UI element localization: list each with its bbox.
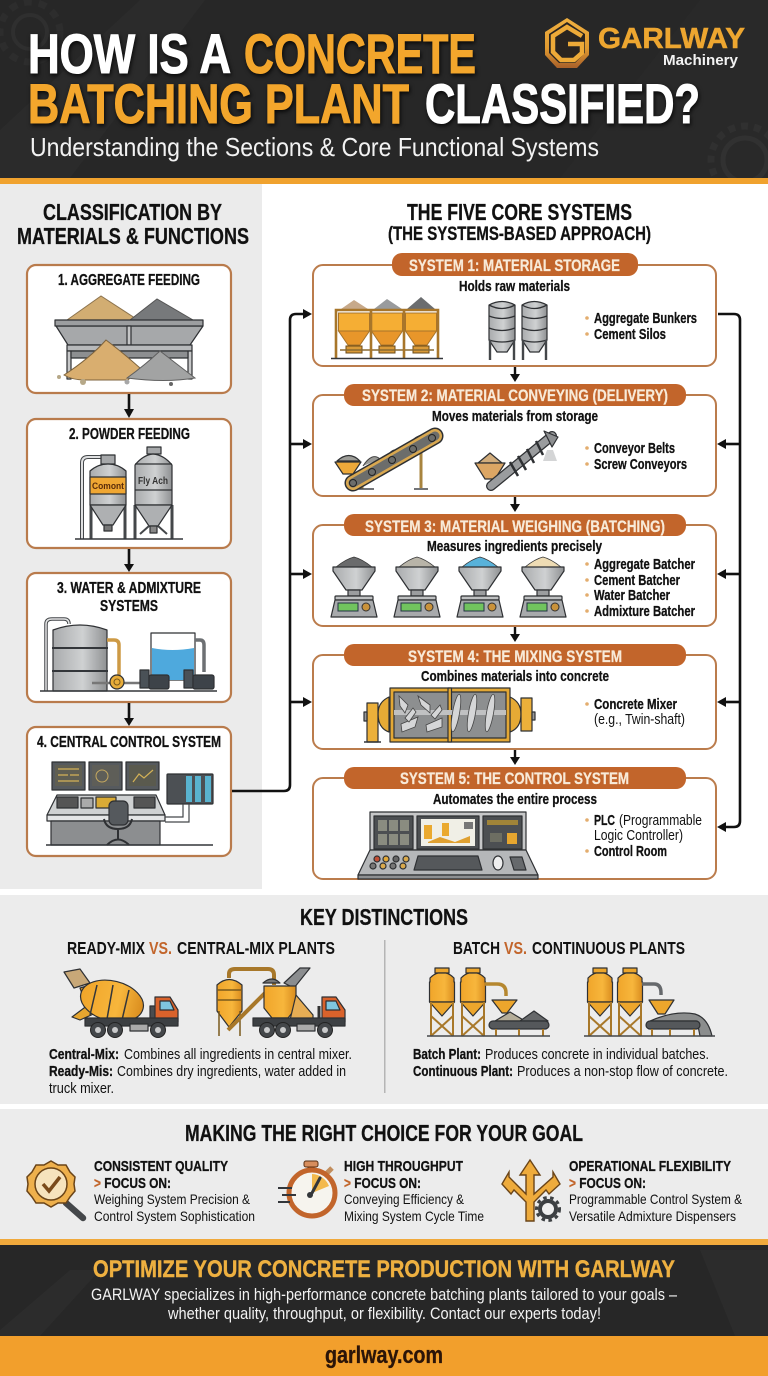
header banner [0,0,768,194]
icon: screw conveyor [475,431,558,486]
text: high throughput [344,1158,484,1224]
subheading: ready-mix vs central-mix: CENTRAL-MIX PLANTS [177,938,335,958]
icon: control desk with monitors [46,762,213,845]
text: high throughput: > FOCUS ON: [344,1175,421,1192]
text: high throughput: Conveying Efficiency & [344,1191,465,1207]
bullet list [585,441,687,473]
icon: conveyor belt [335,434,436,489]
icon: stopwatch [278,1161,335,1216]
card: powder feeding: 2. POWDER FEEDING [69,426,190,443]
card: central control system [27,727,231,856]
heading: key distinctions: KEY DISTINCTIONS [300,904,468,930]
footer text [91,1285,677,1323]
flow line: feedback on the right [717,314,740,832]
subheading: ready-mix vs central-mix [67,938,335,958]
text: central-mix and ready-mix: Combines all ingredients in central mixer. [124,1047,352,1063]
text: central-mix and ready-mix [49,1047,352,1097]
panel: classification by materials and functions [0,184,262,889]
icon: quality badge with magnifier [27,1161,83,1218]
subheading: ready-mix vs central-mix: VS. [149,938,172,958]
logo: Garlway Machinery [545,18,745,69]
heading: the five core systems: (THE SYSTEMS-BASED APPROACH) [388,224,651,245]
subtitle: Understanding the Sections & Core Functional Systems [30,132,599,162]
icon: continuous plant [584,968,715,1036]
panel: system 1 material storage: Holds raw materials [459,278,570,295]
arrow: system 3 to 4 [510,627,520,642]
website bar [0,1336,768,1376]
arrow: aggregate to powder [124,394,134,418]
bullet list [585,557,695,620]
left panel heading: MATERIALS & FUNCTIONS [17,223,249,249]
text: consistent quality: Weighing System Precision & [94,1191,251,1207]
panel: key distinctions [0,895,768,1104]
text: central-mix and ready-mix: Central-Mix: [49,1047,119,1063]
icon: aggregate batcher scale [331,557,377,617]
subheading: batch vs continuous: BATCH [453,938,500,958]
bullet list: (Programmable [619,813,702,829]
logo icon [545,18,589,68]
flow line: control system to all core systems [232,309,312,791]
card: powder feeding [27,419,231,548]
panel: system 2 material conveying: SYSTEM 2: MATERIAL CONVEYING (DELIVERY) [362,386,668,405]
bullet list: (e.g., Twin-shaft) [594,712,685,728]
arrow: water to control [124,703,134,726]
text: operational flexibility [569,1158,743,1224]
bullet list: Conveyor Belts [594,441,675,457]
subheading: batch vs continuous: VS. [504,938,527,958]
panel: system 5 control [313,767,716,879]
bullet list: Aggregate Batcher [594,557,695,573]
text: central-mix and ready-mix: Combines dry ingredients, water added in [117,1064,346,1080]
text: high throughput: Mixing System Cycle Time [344,1208,484,1224]
bullet list: Concrete Mixer [594,697,677,713]
card: water and admixture systems [27,573,231,702]
bullet list: Control Room [594,844,667,860]
text: consistent quality: Control System Sophistication [94,1208,255,1224]
text: central-mix and ready-mix: truck mixer. [49,1081,114,1097]
text: central-mix and ready-mix: Ready-Mis: [49,1064,113,1080]
icon: central-mix plant [217,968,345,1038]
panel: system 4 mixing [313,644,716,749]
arrow: system 1 to 2 [510,367,520,382]
bullet list: PLC [594,813,615,829]
text: consistent quality: > FOCUS ON: [94,1175,171,1192]
icon: diverging arrows with gear [502,1160,560,1221]
heading: making the right choice: MAKING THE RIGHT CHOICE FOR YOUR GOAL [185,1120,583,1146]
title: HOW IS A [28,22,231,85]
logo tagline: Machinery [663,52,739,69]
text: batch and continuous [413,1047,728,1080]
subheading: batch vs continuous [453,938,685,958]
text: batch and continuous: Produces concrete in individual batches. [485,1047,709,1063]
heading: the five core systems [388,199,651,245]
panel: system 2 material conveying [313,384,716,496]
card: central control system: 4. CENTRAL CONTROL SYSTEM [37,734,221,751]
bullet list [585,813,702,860]
icon: aggregate bins and piles [55,296,203,386]
title: CONCRETE [244,22,476,85]
panel: system 4 mixing: Combines materials into concrete [421,668,609,685]
panel: system 2 material conveying: Moves materials from storage [432,408,598,425]
footer text: whether quality, throughput, or flexibility. Contact our experts today! [167,1304,601,1323]
text: consistent quality [94,1158,255,1224]
icon: ready-mix truck [64,969,178,1038]
footer text: GARLWAY specializes in high-performance concrete batching plants tailored to your goals – [91,1285,677,1304]
card: aggregate feeding [27,265,231,393]
text: operational flexibility: > FOCUS ON: [569,1175,646,1192]
text: batch and continuous: Batch Plant: [413,1047,481,1063]
title: BATCHING PLANT [28,72,409,135]
card: aggregate feeding: 1. AGGREGATE FEEDING [58,272,200,289]
icon: cement silos [489,302,547,360]
panel: system 1 material storage [313,253,716,366]
bullet list: Logic Controller) [594,828,683,844]
panel: making the right choice [0,1109,768,1239]
bullet list: Screw Conveyors [594,457,687,473]
arrow: system 4 to 5 [510,750,520,765]
icon: twin-shaft mixer [364,688,535,742]
bullet list: Cement Silos [594,327,666,343]
icon: cement and fly ash silos [75,447,183,539]
text: operational flexibility: OPERATIONAL FLEXIBILITY [569,1158,731,1175]
text: high throughput: HIGH THROUGHPUT [344,1158,463,1175]
bullet list: Admixture Batcher [594,604,695,620]
text: consistent quality: CONSISTENT QUALITY [94,1158,228,1175]
bullet list: Aggregate Bunkers [594,311,697,327]
panel: system 5 control: Automates the entire process [433,791,597,808]
icon: control console [358,812,538,879]
bullet list: Water Batcher [594,588,670,604]
website bar: garlway.com [325,1342,443,1369]
panel: footer call to action [0,1239,768,1336]
subheading: ready-mix vs central-mix: READY-MIX [67,938,145,958]
bullet list [585,697,685,728]
card: water and admixture systems: SYSTEMS [100,598,158,615]
arrow: powder to water [124,549,134,572]
text: batch and continuous: Continuous Plant: [413,1064,513,1080]
arrow: system 2 to 3 [510,497,520,512]
subheading: batch vs continuous: CONTINUOUS PLANTS [532,938,685,958]
panel: system 3 material weighing [313,514,716,626]
panel: system 5 control: SYSTEM 5: THE CONTROL SYSTEM [400,769,629,788]
icon: cement and fly ash silos: Comont [92,481,125,492]
panel: system 3 material weighing: Measures ingredients precisely [427,538,603,555]
text: operational flexibility: Versatile Admixture Dispensers [569,1208,736,1224]
text: batch and continuous: Produces a non-stop flow of concrete. [517,1064,728,1080]
left panel heading: CLASSIFICATION BY [43,199,222,225]
bullet list [585,311,697,343]
logo wordmark: GARLWAY [598,23,745,55]
icon: cement batcher scale [394,557,440,617]
heading: the five core systems: THE FIVE CORE SYSTEMS [407,199,632,225]
panel: system 1 material storage: SYSTEM 1: MATERIAL STORAGE [409,256,620,275]
panel: system 4 mixing: SYSTEM 4: THE MIXING SYSTEM [408,647,622,666]
panel: system 3 material weighing: SYSTEM 3: MATERIAL WEIGHING (BATCHING) [365,517,665,536]
icon: admixture batcher scale [520,557,566,617]
icon: batch plant [427,968,550,1036]
text: operational flexibility: Programmable Control System & [569,1191,743,1207]
icon: aggregate bunkers [331,297,443,359]
icon: cement and fly ash silos: Fly Ach [138,476,168,487]
icon: water batcher scale [457,557,503,617]
icon: water tanks and pumps [40,619,217,691]
left panel heading [17,199,249,249]
bullet list: Cement Batcher [594,573,680,589]
card: water and admixture systems: 3. WATER & ADMIXTURE [57,580,201,597]
title [28,22,700,135]
